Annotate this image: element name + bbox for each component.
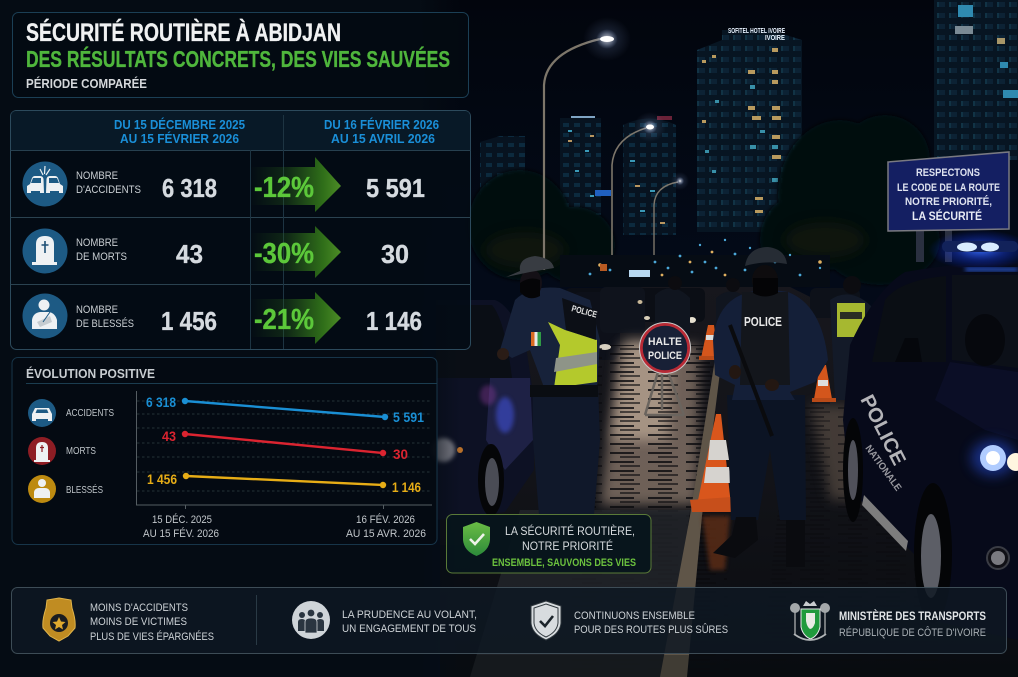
footer item: people bbox=[292, 601, 477, 639]
footer item: shield: POUR DES ROUTES PLUS SÛRES bbox=[574, 623, 728, 636]
arrow: -30%: -30% bbox=[254, 238, 314, 270]
axis label: second period: 16 FÉV. 2026 bbox=[356, 513, 415, 526]
icon: group of people bbox=[292, 601, 330, 639]
row: accidents bbox=[22, 157, 425, 212]
axis label: second period bbox=[346, 513, 426, 540]
billboard: RESPECTONS bbox=[916, 167, 980, 179]
back officers bbox=[655, 276, 875, 400]
icon: tombstone bbox=[22, 228, 68, 274]
axis label: first period: 15 DÉC. 2025 bbox=[152, 513, 212, 526]
hotel sign bbox=[728, 28, 785, 42]
icon: injured person bbox=[22, 294, 68, 338]
period label: PÉRIODE COMPARÉE bbox=[26, 76, 147, 91]
halte police sign bbox=[640, 322, 690, 415]
series: accidents: 5 591 bbox=[393, 409, 424, 425]
footer item: ministry bbox=[790, 601, 986, 640]
heading: ÉVOLUTION POSITIVE bbox=[26, 366, 155, 381]
legend: morts: MORTS bbox=[66, 446, 96, 457]
footer item: ministry: MINISTÈRE DES TRANSPORTS bbox=[839, 608, 986, 623]
hotel sign: IVOIRE bbox=[765, 35, 785, 42]
header: first period: DU 15 DÉCEMBRE 2025 bbox=[114, 117, 245, 132]
axis label: first period: AU 15 FÉV. 2026 bbox=[143, 527, 219, 540]
panel: title bbox=[12, 12, 468, 98]
billboard: NOTRE PRIORITÉ, bbox=[905, 195, 992, 208]
header: first period: AU 15 FÉVRIER 2026 bbox=[120, 131, 239, 146]
series: accidents: 6 318 bbox=[146, 394, 176, 410]
distant buildings bbox=[480, 116, 676, 235]
truck lettering: NATIONALE bbox=[863, 443, 903, 494]
street bokeh and traffic bbox=[560, 239, 860, 360]
halte police sign: POLICE bbox=[648, 350, 682, 362]
callout text: ENSEMBLE, SAUVONS DES VIES bbox=[492, 557, 636, 569]
road bbox=[440, 282, 1018, 677]
callout text: LA SÉCURITÉ ROUTIÈRE, bbox=[505, 523, 635, 538]
legend bbox=[28, 399, 114, 503]
label: NOMBRE bbox=[76, 304, 118, 316]
icon: white shield bbox=[531, 601, 561, 640]
legend: blessés: BLESSÉS bbox=[66, 483, 103, 496]
label: NOMBRE bbox=[76, 170, 118, 182]
billboard bbox=[888, 152, 1009, 262]
left car bbox=[431, 300, 534, 520]
header: second period: AU 15 AVRIL 2026 bbox=[331, 131, 435, 146]
footer item: shield: CONTINUONS ENSEMBLE bbox=[574, 610, 695, 622]
footer item: badge: MOINS D'ACCIDENTS bbox=[90, 602, 188, 614]
arrow: -21%: -21% bbox=[254, 304, 314, 336]
label bbox=[76, 304, 134, 330]
arrow: -12%: -12% bbox=[254, 172, 314, 204]
subheading: DES RÉSULTATS CONCRETS, DES VIES SAUVÉES bbox=[26, 45, 450, 72]
icon: green shield bbox=[463, 522, 490, 556]
header: second period bbox=[324, 117, 439, 146]
row: morts bbox=[22, 226, 409, 278]
icon: coat of arms bbox=[790, 601, 830, 640]
value: 30 bbox=[381, 239, 409, 269]
billboard: LA SÉCURITÉ bbox=[912, 208, 982, 223]
footer item: shield bbox=[531, 601, 728, 640]
footer item: badge: PLUS DE VIES ÉPARGNÉES bbox=[90, 630, 214, 643]
callout text: NOTRE PRIORITÉ bbox=[522, 538, 613, 553]
series: morts bbox=[162, 428, 408, 462]
truck lettering: POLICE bbox=[856, 391, 910, 469]
series: blessés: 1 456 bbox=[147, 471, 177, 487]
line chart bbox=[136, 391, 432, 509]
police truck bbox=[843, 262, 1018, 640]
label bbox=[76, 237, 127, 263]
panel: evolution chart bbox=[12, 358, 437, 544]
callout text bbox=[492, 523, 636, 569]
halte police sign: HALTE bbox=[648, 336, 682, 348]
officer left: POLICE bbox=[570, 303, 598, 320]
footer item: ministry: RÉPUBLIQUE DE CÔTE D'IVOIRE bbox=[839, 626, 986, 639]
series: morts: 43 bbox=[162, 428, 176, 444]
callout: priority bbox=[446, 514, 651, 573]
panel: comparison table bbox=[10, 110, 470, 350]
icon: gold badge bbox=[43, 598, 75, 641]
heading: SÉCURITÉ ROUTIÈRE À ABIDJAN bbox=[26, 18, 341, 47]
footer item: people: LA PRUDENCE AU VOLANT, bbox=[342, 609, 477, 621]
trees bbox=[468, 115, 940, 285]
legend: accidents: ACCIDENTS bbox=[66, 408, 114, 419]
footer item: people: UN ENGAGEMENT DE TOUS bbox=[342, 623, 476, 635]
label: DE BLESSÉS bbox=[76, 317, 134, 330]
series: blessés: 1 146 bbox=[392, 479, 421, 495]
right tower bbox=[934, 0, 1018, 160]
series: accidents bbox=[146, 394, 424, 425]
value: 6 318 bbox=[162, 173, 217, 203]
label bbox=[76, 170, 141, 196]
traffic cones small bbox=[699, 325, 836, 402]
header: first period bbox=[114, 117, 245, 146]
arrow: -12% bbox=[250, 157, 341, 212]
value: 1 456 bbox=[161, 306, 217, 336]
value: 1 146 bbox=[366, 306, 422, 336]
hotel tower bbox=[697, 30, 802, 232]
big traffic cone bbox=[690, 414, 733, 570]
axis label: second period: AU 15 AVR. 2026 bbox=[346, 528, 426, 540]
officer right bbox=[713, 247, 828, 567]
arrow: -30% bbox=[250, 226, 341, 278]
value: 43 bbox=[176, 239, 203, 269]
header: second period: DU 16 FÉVRIER 2026 bbox=[324, 117, 439, 132]
value: 5 591 bbox=[366, 173, 425, 203]
series: blessés bbox=[147, 471, 421, 495]
axis label: first period bbox=[143, 513, 219, 540]
label: D'ACCIDENTS bbox=[76, 184, 141, 196]
panel: footer bbox=[12, 588, 1006, 654]
footer item: badge bbox=[43, 598, 214, 643]
label: DE MORTS bbox=[76, 251, 127, 263]
officer left bbox=[497, 256, 600, 515]
label: NOMBRE bbox=[76, 237, 118, 249]
blue emergency light bbox=[928, 230, 1018, 271]
wet reflections bbox=[470, 340, 960, 677]
arrow: -21% bbox=[250, 292, 341, 344]
icon: car crash bbox=[22, 162, 68, 206]
left dark overlay bbox=[0, 0, 480, 677]
officer right: POLICE bbox=[744, 314, 782, 329]
row: blessés bbox=[22, 292, 422, 344]
series: morts: 30 bbox=[393, 446, 408, 462]
hotel sign: SOFITEL HOTEL IVOIRE bbox=[728, 28, 785, 35]
road median line bbox=[660, 340, 724, 677]
street lamps bbox=[544, 39, 678, 285]
footer item: badge: MOINS DE VICTIMES bbox=[90, 616, 187, 628]
